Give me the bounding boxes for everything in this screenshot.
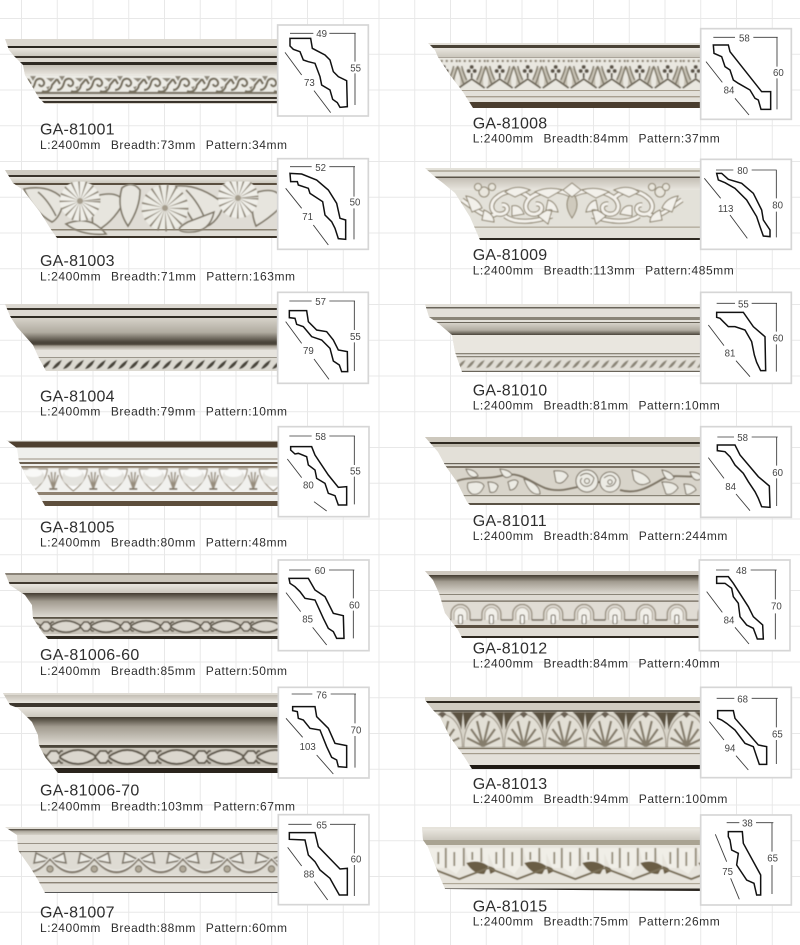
profile panel: GA-81008: 60 bbox=[773, 68, 784, 79]
model number: GA-81011: GA-81011 bbox=[473, 513, 547, 530]
moulding: GA-81003 bbox=[0, 170, 300, 238]
profile panel: GA-81013: 68 bbox=[737, 694, 748, 705]
model number: GA-81006-70: GA-81006-70 bbox=[40, 782, 139, 799]
specification: GA-81003: L:2400mm Breadth:71mm Pattern:163mm bbox=[40, 269, 295, 283]
model number: GA-81001: GA-81001 bbox=[40, 121, 115, 138]
profile panel: GA-81012: 48 bbox=[736, 566, 747, 577]
product: GA-81009 bbox=[400, 159, 791, 277]
profile panel: GA-81004: 79 bbox=[303, 346, 314, 357]
model number: GA-81015: GA-81015 bbox=[473, 899, 547, 916]
profile panel: GA-81006-60: 60 bbox=[349, 600, 360, 611]
profile panel: GA-81007: 65 bbox=[316, 820, 327, 831]
model number: GA-81008: GA-81008 bbox=[473, 116, 547, 133]
product: GA-81010 bbox=[400, 292, 791, 413]
profile panel: GA-81011 bbox=[701, 427, 791, 517]
moulding: GA-81007 bbox=[0, 827, 300, 893]
product: GA-81015 bbox=[400, 815, 791, 929]
specification: GA-81006-60: L:2400mm Breadth:85mm Pattern:50mm bbox=[40, 664, 287, 678]
specification: GA-81001: L:2400mm Breadth:73mm Pattern:34mm bbox=[40, 138, 287, 152]
profile panel: GA-81003: 52 bbox=[315, 163, 326, 174]
profile panel: GA-81005: 55 bbox=[350, 466, 361, 477]
profile panel: GA-81009: 80 bbox=[772, 200, 783, 211]
profile panel: GA-81006-70 bbox=[278, 687, 369, 778]
profile panel: GA-81015: 38 bbox=[742, 819, 753, 830]
specification: GA-81012: L:2400mm Breadth:84mm Pattern:40mm bbox=[473, 656, 720, 670]
moulding: GA-81005 bbox=[0, 440, 300, 506]
profile panel: GA-81015: 75 bbox=[722, 867, 733, 878]
moulding: GA-81010 bbox=[425, 304, 700, 372]
profile panel: GA-81006-60: 60 bbox=[315, 566, 325, 577]
profile panel: GA-81009 bbox=[701, 159, 791, 249]
specification: GA-81009: L:2400mm Breadth:113mm Pattern:485mm bbox=[473, 263, 734, 277]
specification: GA-81005: L:2400mm Breadth:80mm Pattern:48mm bbox=[40, 536, 287, 550]
specification: GA-81007: L:2400mm Breadth:88mm Pattern:60mm bbox=[40, 921, 287, 935]
specification: GA-81008: L:2400mm Breadth:84mm Pattern:37mm bbox=[473, 132, 720, 146]
specification: GA-81004: L:2400mm Breadth:79mm Pattern:10mm bbox=[40, 405, 287, 419]
model number: GA-81010: GA-81010 bbox=[473, 382, 547, 399]
profile panel: GA-81003 bbox=[278, 159, 368, 249]
profile panel: GA-81011: 60 bbox=[772, 468, 783, 479]
product: GA-81012 bbox=[400, 560, 790, 670]
profile panel: GA-81013 bbox=[701, 687, 791, 778]
profile panel: GA-81006-60: 85 bbox=[302, 614, 313, 625]
profile panel: GA-81003: 50 bbox=[350, 198, 360, 209]
product: GA-81006-70 bbox=[0, 687, 369, 813]
profile panel: GA-81003: 71 bbox=[302, 212, 313, 223]
model number: GA-81009: GA-81009 bbox=[473, 247, 547, 264]
profile panel: GA-81005: 58 bbox=[315, 432, 326, 443]
model number: GA-81005: GA-81005 bbox=[40, 519, 115, 536]
moulding: GA-81011 bbox=[425, 437, 700, 505]
specification: GA-81015: L:2400mm Breadth:75mm Pattern:26mm bbox=[473, 915, 720, 929]
profile panel: GA-81011: 84 bbox=[725, 482, 737, 493]
product: GA-81008 bbox=[400, 29, 791, 146]
moulding: GA-81012 bbox=[425, 571, 698, 638]
profile panel: GA-81001: 73 bbox=[304, 78, 315, 89]
moulding: GA-81013 bbox=[425, 697, 700, 769]
model number: GA-81012: GA-81012 bbox=[473, 641, 547, 658]
specification: GA-81006-70: L:2400mm Breadth:103mm Pattern:67mm bbox=[40, 799, 295, 813]
profile panel: GA-81005 bbox=[278, 427, 369, 517]
product: GA-81004 bbox=[0, 292, 368, 419]
profile panel: GA-81012 bbox=[699, 560, 790, 651]
profile panel: GA-81010: 81 bbox=[725, 348, 735, 359]
profile panel: GA-81006-70: 70 bbox=[351, 725, 361, 736]
product: GA-81013 bbox=[400, 687, 791, 806]
specification: GA-81011: L:2400mm Breadth:84mm Pattern:244mm bbox=[473, 529, 727, 543]
profile panel: GA-81012: 84 bbox=[724, 615, 735, 626]
profile panel: GA-81001 bbox=[278, 25, 368, 116]
profile panel: GA-81008 bbox=[701, 29, 791, 119]
profile panel: GA-81007: 60 bbox=[351, 855, 361, 866]
profile panel: GA-81012: 70 bbox=[771, 601, 782, 612]
product: GA-81007 bbox=[0, 815, 369, 935]
model number: GA-81013: GA-81013 bbox=[473, 776, 547, 793]
profile panel: GA-81001: 55 bbox=[350, 64, 361, 75]
profile panel: GA-81009: 113 bbox=[718, 204, 733, 215]
profile panel: GA-81004: 57 bbox=[315, 297, 326, 308]
moulding: GA-81004 bbox=[0, 304, 300, 371]
profile panel: GA-81001: 49 bbox=[316, 29, 327, 40]
profile panel: GA-81007: 88 bbox=[304, 869, 314, 880]
profile panel: GA-81015: 65 bbox=[767, 853, 778, 864]
profile panel: GA-81013: 65 bbox=[772, 729, 783, 740]
profile panel: GA-81010 bbox=[701, 292, 791, 383]
product: GA-81001 bbox=[0, 25, 368, 152]
moulding: GA-81008 bbox=[428, 43, 700, 108]
model number: GA-81003: GA-81003 bbox=[40, 253, 115, 270]
profile panel: GA-81004: 55 bbox=[350, 332, 361, 343]
profile panel: GA-81008: 84 bbox=[724, 85, 735, 96]
profile panel: GA-81015 bbox=[701, 815, 791, 905]
model number: GA-81007: GA-81007 bbox=[40, 905, 115, 922]
profile panel: GA-81007 bbox=[278, 815, 369, 905]
profile panel: GA-81010: 55 bbox=[738, 299, 749, 310]
moulding: GA-81015 bbox=[422, 827, 700, 891]
model number: GA-81004: GA-81004 bbox=[40, 389, 115, 406]
model number: GA-81006-60: GA-81006-60 bbox=[40, 647, 139, 664]
moulding: GA-81006-70 bbox=[0, 693, 300, 773]
profile panel: GA-81006-70: 103 bbox=[300, 742, 316, 753]
profile panel: GA-81013: 94 bbox=[725, 744, 736, 755]
moulding: GA-81009 bbox=[425, 168, 700, 240]
moulding: GA-81006-60 bbox=[0, 573, 300, 639]
profile panel: GA-81006-60 bbox=[278, 560, 369, 651]
product: GA-81003 bbox=[0, 159, 368, 283]
profile panel: GA-81006-70: 76 bbox=[316, 690, 327, 701]
product: GA-81005 bbox=[0, 427, 369, 550]
specification: GA-81010: L:2400mm Breadth:81mm Pattern:10mm bbox=[473, 399, 720, 413]
moulding: GA-81001 bbox=[0, 39, 300, 104]
profile panel: GA-81004 bbox=[278, 292, 368, 383]
product: GA-81006-60 bbox=[0, 560, 369, 678]
specification: GA-81013: L:2400mm Breadth:94mm Pattern:100mm bbox=[473, 792, 727, 806]
profile panel: GA-81010: 60 bbox=[773, 334, 783, 345]
profile panel: GA-81005: 80 bbox=[303, 480, 314, 491]
profile panel: GA-81011: 58 bbox=[737, 433, 748, 444]
product: GA-81011 bbox=[400, 427, 791, 543]
profile panel: GA-81008: 58 bbox=[739, 34, 750, 45]
profile panel: GA-81009: 80 bbox=[737, 166, 748, 177]
